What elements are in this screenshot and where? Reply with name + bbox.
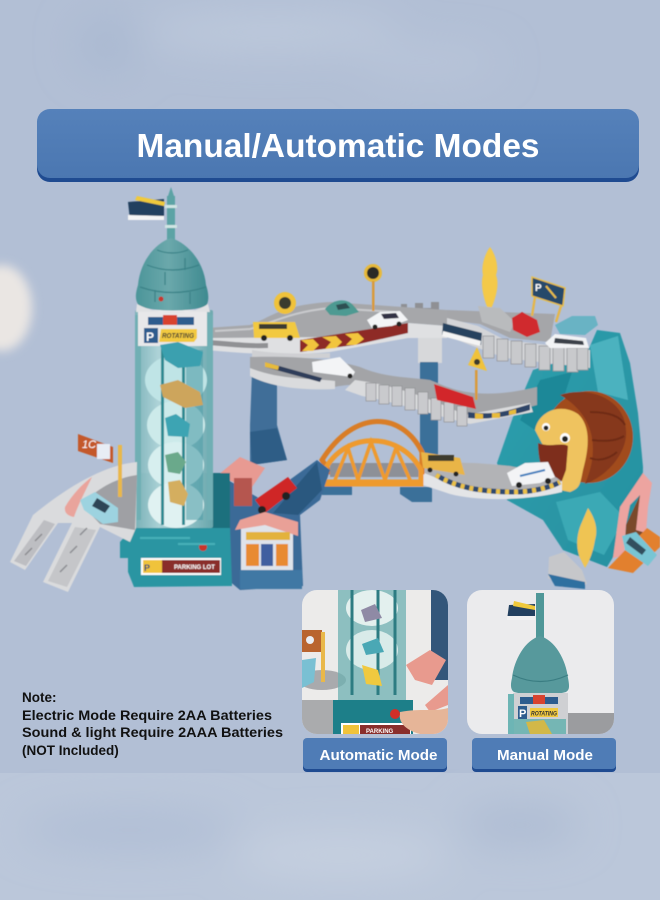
road signs [274,264,565,400]
pink tunnel and blue car [608,473,660,573]
automatic mode photo [298,590,448,736]
red train middle road [434,384,476,409]
middle road [250,357,537,426]
mountain [497,330,643,567]
road signs: P [535,283,542,294]
manual mode photo: P [519,708,526,720]
upper rampart track [395,302,590,372]
red car [512,312,540,337]
white van on ramparts [545,334,589,348]
lion head [535,391,633,492]
dome and flag [128,187,210,313]
left spiral entry ramp [10,462,137,592]
checkered sign under upper road [442,323,482,346]
automatic mode label: Automatic Mode [320,748,438,764]
green car upper road [325,300,359,316]
tower label plate: P [146,330,154,344]
cars on tracks [80,300,598,524]
upper road [207,302,447,358]
white police car [507,462,555,488]
battery note: (NOT Included) [22,743,119,758]
manual mode label [472,738,616,772]
tower label plate: ROTATING [162,333,194,340]
battery note: Note: [22,690,56,705]
automatic mode photo: PARKING [366,729,394,735]
white car upper road [367,311,408,330]
light blue car on ramp [80,492,118,524]
lower road and chevron band [420,463,562,499]
orange flag sign [78,434,122,497]
blue base with pink shed and store [218,457,330,590]
yellow trees and rocks [478,247,596,589]
white van middle road [312,357,355,378]
orange bridge [322,421,422,484]
toy playset illustration [10,187,660,592]
battery note: Electric Mode Require 2AA Batteries [22,708,272,723]
teal base and button: PARKING LOT [174,565,215,571]
orange flag sign: 1C [82,439,96,451]
battery note: Sound & light Require 2AAA Batteries [22,725,283,740]
battery note [22,690,283,758]
support pillars [250,333,442,502]
manual mode label: Manual Mode [497,748,593,764]
manual mode photo [467,590,614,734]
cars in tower [160,342,203,368]
title banner [37,109,639,182]
teal base and button: P [144,563,150,573]
glass tower [135,310,213,528]
yellow bus lower road [421,452,465,476]
yellow bus on upper road [253,322,300,341]
automatic mode label [303,738,447,772]
title banner: Manual/Automatic Modes [136,127,540,164]
manual mode photo: ROTATING [531,712,557,718]
teal car on ramparts [555,316,598,335]
teal base and button [120,473,232,587]
tower label plate [138,310,207,346]
blurred cloud at left edge [0,265,32,351]
